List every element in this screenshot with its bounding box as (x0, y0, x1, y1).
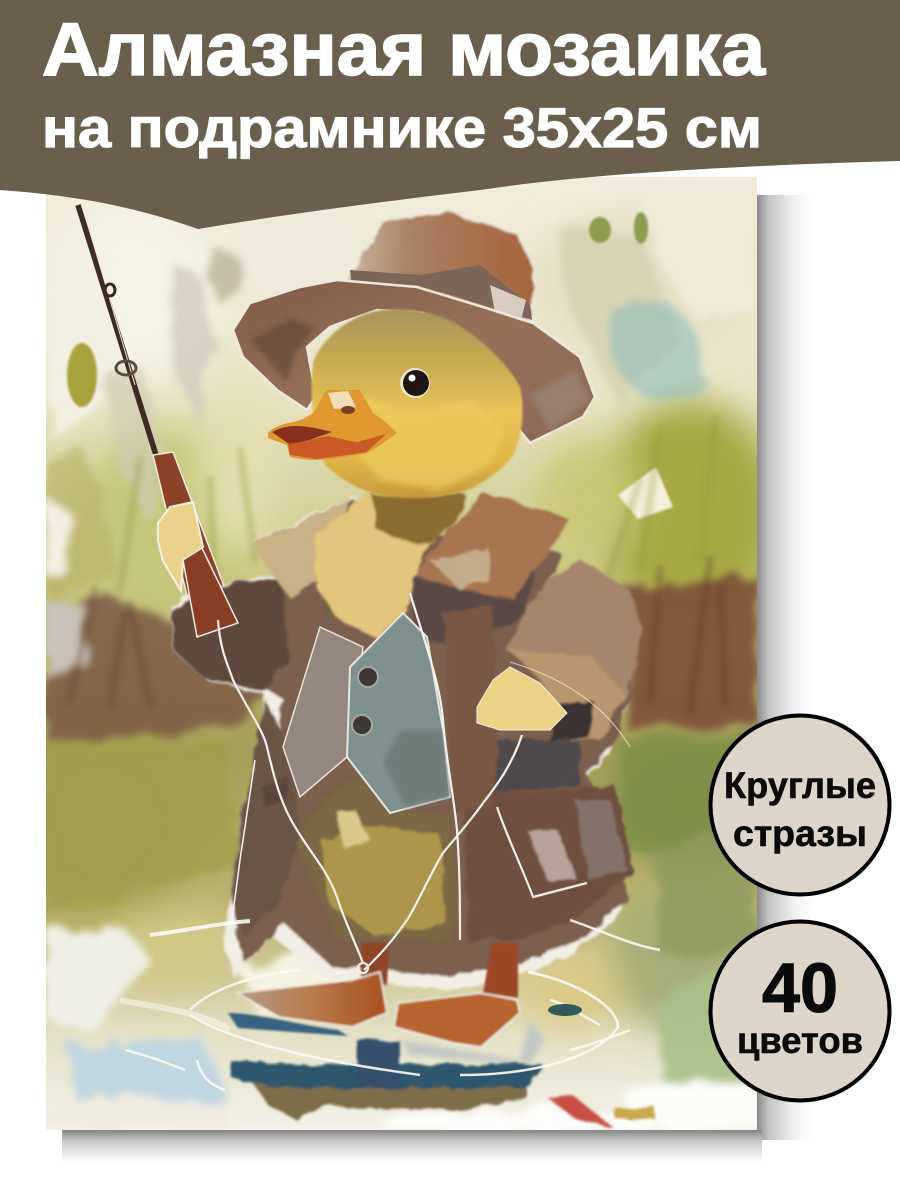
sleeves and coat panels (173, 492, 642, 940)
left and right reeds (46, 595, 256, 740)
badge: 40 colors: 40 (762, 949, 838, 1027)
legs and feet (237, 943, 520, 1047)
duck head (311, 309, 523, 498)
hat (233, 212, 595, 443)
painting: duck fishing (0, 177, 780, 1130)
coat (173, 497, 635, 990)
rod handle (152, 451, 225, 596)
badge: 40 colors (710, 922, 890, 1100)
hat crown (347, 212, 533, 320)
badge: round rhinestones: Круглые (724, 765, 876, 806)
subtitle: на подрамнике 35х25 см (42, 96, 762, 159)
vest (283, 613, 450, 813)
left hand (158, 502, 203, 591)
fishing rod (78, 205, 156, 455)
head cheek (360, 428, 500, 491)
coat silhouette (173, 497, 633, 990)
right hand (477, 667, 567, 730)
title: Алмазная мозаика (42, 7, 766, 91)
belly (297, 777, 460, 943)
water ripples (120, 920, 660, 1090)
badge: 40 colors: цветов (737, 1020, 863, 1061)
badge: round rhinestones (710, 716, 890, 894)
eye (400, 368, 430, 398)
badge: round rhinestones: стразы (733, 813, 867, 854)
canvas side shadow (62, 195, 815, 1162)
header banner (0, 0, 900, 229)
painted background (0, 177, 780, 1130)
chest fur (312, 493, 467, 638)
reed strokes (70, 420, 725, 710)
grey blotches top (210, 250, 245, 310)
rod handle in hand (183, 548, 238, 637)
bill (268, 390, 397, 460)
hat brim (233, 280, 595, 443)
dark water spot (548, 1004, 582, 1016)
fishing line (218, 593, 630, 973)
hat band (350, 265, 532, 320)
water reflection (228, 1013, 656, 1129)
